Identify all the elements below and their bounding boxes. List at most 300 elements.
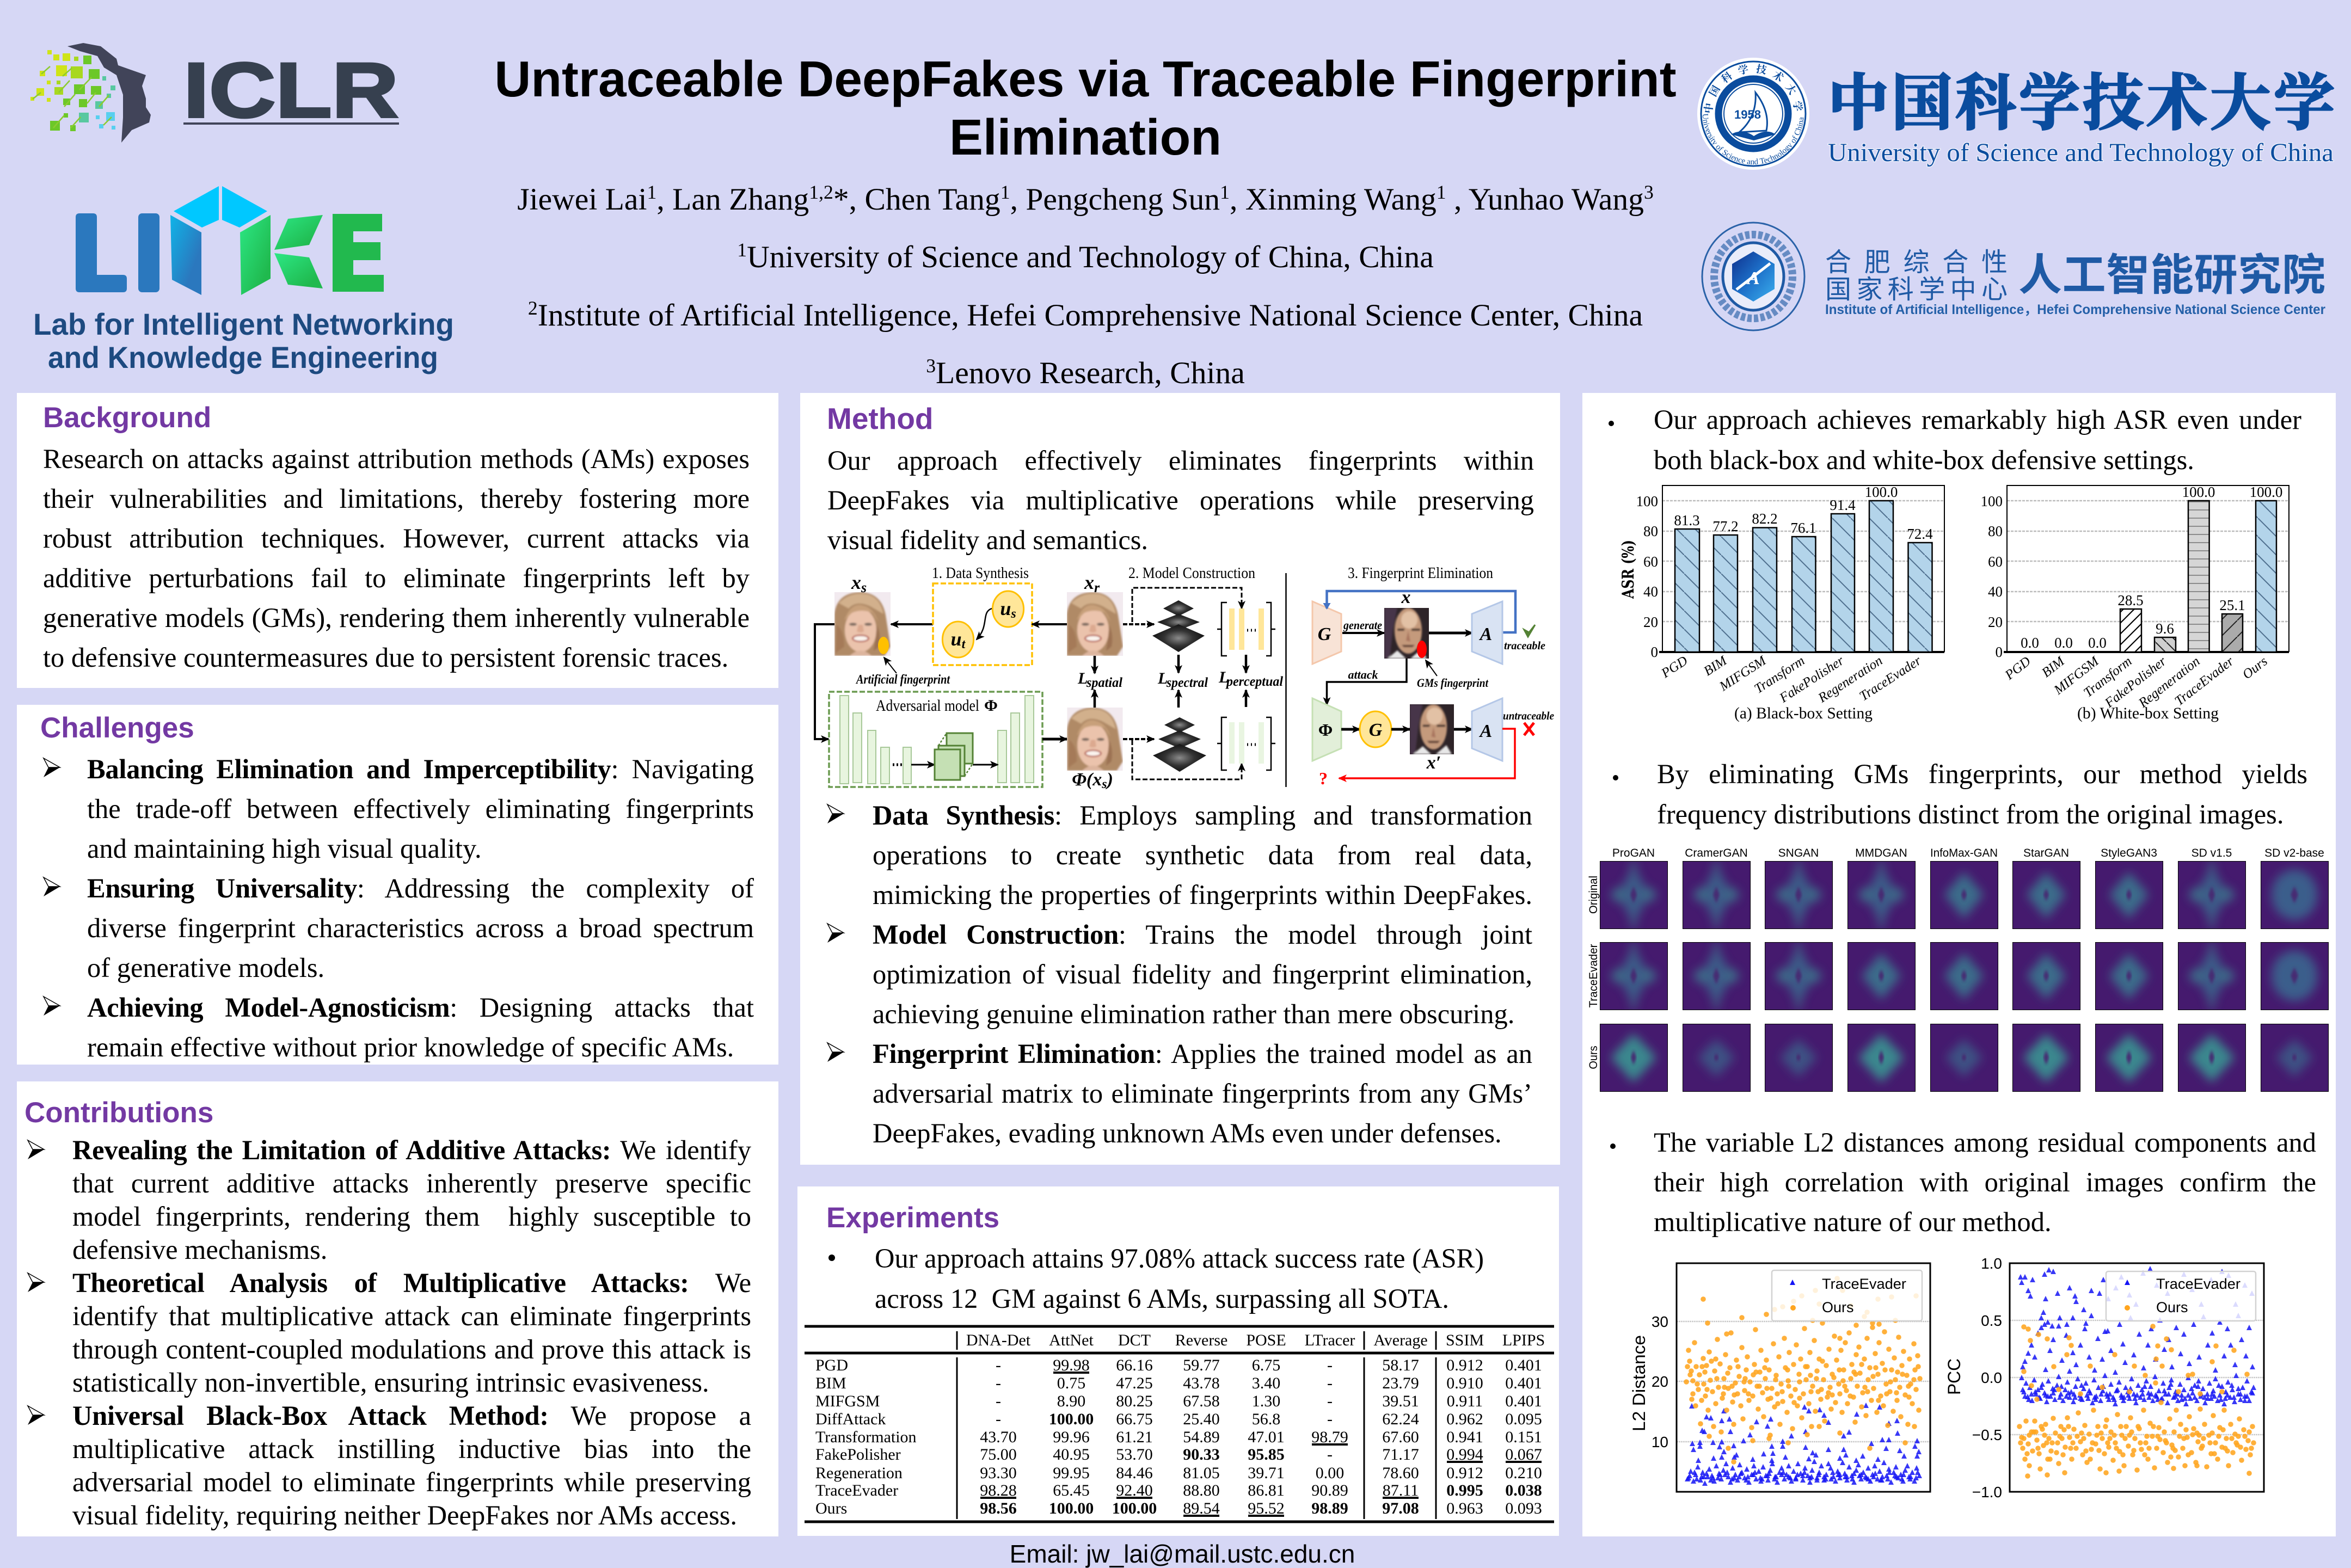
value labels: 25.1 (2219, 597, 2245, 613)
icon: lower spectrum diamonds (1153, 717, 1206, 772)
table row labels: FakePolisher (815, 1446, 901, 1464)
icon: bullet arrows (27, 1139, 46, 1425)
table values: - (996, 1392, 1001, 1410)
table values: 90.33 (1183, 1446, 1220, 1464)
value labels: 0.0 (2021, 635, 2039, 651)
label: output: ) (1106, 770, 1113, 790)
icon: bullet (828, 1255, 835, 1261)
text block: challenges list: of generative models. (87, 952, 324, 983)
label: untraceable: untraceable (1503, 709, 1554, 722)
table values: 39.51 (1382, 1392, 1419, 1410)
image: attacked face (1410, 704, 1454, 754)
heading: data synthesis: 1. Data Synthesis (932, 565, 1029, 582)
text block: contributions list (72, 1135, 751, 1530)
icon: upper feature bars (1217, 602, 1275, 656)
text block: contributions list: multiplicative attack instilling inductive bias into the (72, 1434, 751, 1464)
table values: 78.60 (1382, 1464, 1419, 1482)
value labels: 100.0 (2182, 484, 2215, 500)
table values: 98.89 (1311, 1499, 1348, 1517)
legend: L2 chart: TraceEvader (1822, 1276, 1906, 1292)
table values: 97.08 (1382, 1499, 1419, 1517)
arrow: attack (1327, 659, 1407, 705)
table row labels: MIFGSM (815, 1392, 880, 1410)
table values: 25.40 (1183, 1410, 1220, 1428)
labels: losses: L (1157, 669, 1168, 687)
table values: 67.58 (1183, 1392, 1220, 1410)
chart: scatter plots (1628, 1252, 2270, 1518)
label: x: x (1401, 587, 1411, 607)
image: output face (1067, 708, 1123, 771)
panel a: black-box bar chart (1619, 484, 1944, 722)
table row labels: Transformation (815, 1428, 917, 1446)
label: x prime: x′ (1426, 753, 1441, 773)
text block: background: to defensive countermeasures due to persistent forensic traces. (43, 642, 728, 673)
text block: ASR finding (1654, 404, 2301, 475)
block: attributor A lower (1472, 698, 1502, 761)
arrow: face to attributor (1454, 728, 1472, 730)
value labels: 72.4 (1907, 526, 1933, 542)
label: xs: s (861, 580, 867, 595)
text block: method intro: DeepFakes via multiplicative operations while preserving (827, 485, 1534, 515)
icon: institute seal: A (1746, 268, 1760, 288)
row labels: Ours (1587, 1046, 1600, 1069)
text block: method steps: Data Synthesis: Employs sampling and transformation (873, 800, 1532, 831)
icon: USTC seal: University of Science and Technology of China (1703, 113, 1804, 164)
heading: experiments: Experiments (826, 1202, 999, 1234)
text block: contributions list: Revealing the Limitation of Additive Attacks: We identify (72, 1135, 751, 1165)
text block: frequency finding (1657, 759, 2307, 829)
table values: 99.96 (1053, 1428, 1090, 1446)
y ticks: 60 (1643, 554, 1658, 570)
x labels: BIM (1701, 653, 1730, 679)
column titles: ProGAN (1612, 847, 1655, 859)
arrow: generate: generate (1343, 618, 1382, 632)
text: lab name: Lab for Intelligent Networking (33, 307, 454, 341)
arrow: model to output face (1042, 738, 1067, 740)
y axis label: ASR (%) (1619, 540, 1638, 599)
series: TraceEvader L2 points (1687, 1405, 1919, 1483)
box: adversarial model: Adversarial model (876, 697, 979, 715)
y ticks: 40 (1643, 583, 1658, 600)
text block: challenges list: diverse fingerprint characteristics across a broad spectrum (87, 913, 754, 943)
icon: LINKE letter shapes (76, 186, 384, 295)
table values: 6.75 (1252, 1356, 1280, 1374)
y ticks (1980, 493, 2003, 660)
authors and affiliations: 3Lenovo Research, China (926, 355, 1245, 390)
value labels: 100.0 (2250, 484, 2282, 500)
y axis: PCC: −1.0 (1972, 1484, 2002, 1501)
diagram: method pipeline (814, 565, 1554, 791)
box: data synthesis: u (951, 628, 962, 650)
x labels: BIM (2039, 654, 2068, 680)
table values: 95.85 (1248, 1446, 1285, 1464)
heading: challenges: Challenges (40, 712, 194, 744)
column titles: SD v2-base (2264, 847, 2324, 859)
table row labels (815, 1356, 917, 1517)
series: Ours PCC points (2019, 1326, 2254, 1476)
text block: frequency finding: frequency distributions distinct from the original images. (1657, 799, 2284, 829)
table values: 88.80 (1183, 1481, 1220, 1499)
label: output: s (1101, 777, 1107, 791)
y axis: L2 distance: 20 (1652, 1373, 1668, 1390)
text block: contributions list: visual fidelity, requiring neither DeepFakes nor AMs access. (72, 1500, 737, 1530)
y axis: PCC (1944, 1255, 2002, 1501)
table values: 81.05 (1183, 1464, 1220, 1482)
row: original spectra (1600, 860, 2329, 930)
column titles: CramerGAN (1685, 847, 1748, 859)
column titles: InfoMax-GAN (1930, 847, 1998, 859)
scatter: PCC (1944, 1255, 2264, 1501)
table values: 95.52 (1248, 1499, 1285, 1517)
block: attributor A: A (1479, 624, 1492, 644)
table values: 39.71 (1248, 1464, 1285, 1482)
text block: L2 finding (1654, 1123, 2316, 1242)
table values: 1.30 (1252, 1392, 1280, 1410)
arrow: dashed xr to features (1123, 623, 1154, 625)
label: artificial fingerprint: Artificial fingerprint (855, 673, 950, 687)
text block: background: their vulnerabilities and limitations, thereby fostering more (43, 483, 750, 514)
x labels (2002, 654, 2270, 711)
arrows: down to losses (1095, 655, 1246, 673)
table row labels: TraceEvader (815, 1481, 898, 1499)
y ticks: 0 (1650, 644, 1658, 660)
bars (1675, 501, 1932, 652)
value labels: 91.4 (1830, 497, 1856, 513)
table: attack success rates (805, 1325, 1554, 1523)
text block: background (43, 444, 750, 673)
table values: 98.28 (980, 1481, 1017, 1499)
table values: - (1327, 1446, 1333, 1464)
text block: background: robust attribution techniques. However, current attacks via (43, 523, 750, 554)
column titles (1612, 847, 2324, 859)
table values: 59.77 (1183, 1356, 1220, 1374)
arrow: feedback to adversarial model (815, 624, 834, 739)
text block: method steps: mimicking the properties of fingerprints within DeepFakes. (873, 880, 1532, 910)
text block: L2 finding: The variable L2 distances among residual components and (1654, 1127, 2316, 1158)
y axis: L2 distance: 30 (1652, 1313, 1668, 1330)
icon: bullet (1613, 775, 1618, 780)
table values: 0.067 (1505, 1446, 1542, 1464)
table values: 0.912 (1446, 1464, 1483, 1482)
table row labels: Ours (815, 1499, 847, 1517)
box: data synthesis: u (1000, 598, 1011, 619)
table values: 43.78 (1183, 1374, 1220, 1392)
table values: 62.24 (1382, 1410, 1419, 1428)
label: question mark: ? (1319, 768, 1328, 788)
labels: losses: perceptual (1225, 674, 1283, 689)
icon: institute seal (1702, 223, 1804, 330)
block: adversarial model phi (1312, 698, 1341, 761)
value labels: 100.0 (1865, 484, 1898, 500)
label: xr: r (1094, 580, 1100, 595)
row: TraceEvader spectra (1600, 941, 2329, 1011)
panel: experiments (797, 1186, 1559, 1536)
text block: contributions list: identify that multiplicative attack can eliminate fingerprints (72, 1301, 751, 1331)
y ticks: 0 (1996, 644, 2003, 660)
block: generator G (1312, 601, 1341, 664)
text block: method steps: achieving genuine elimination rather than mere obscuring. (873, 999, 1514, 1029)
panel: method (800, 393, 1560, 1165)
label: GMs fingerprint (1417, 660, 1489, 690)
table values: 0.962 (1446, 1410, 1483, 1428)
legend: L2 chart: Ours (1822, 1299, 1854, 1315)
text block: method intro: visual fidelity and semantics. (827, 525, 1148, 555)
text block: experiments summary: across 12 GM against 6 AMs, surpassing all SOTA. (875, 1283, 1449, 1314)
text block: method steps: adversarial matrix to eliminate fingerprints from any GMs’ (873, 1078, 1532, 1109)
table values: 3.40 (1252, 1374, 1280, 1392)
table values: 56.8 (1252, 1410, 1280, 1428)
table values: 89.54 (1183, 1499, 1220, 1517)
text block: L2 finding: their high correlation with original images confirm the (1654, 1167, 2316, 1197)
table row labels: Regeneration (815, 1464, 903, 1482)
table values: 0.093 (1505, 1499, 1542, 1517)
y axis: PCC: 0.0 (1981, 1369, 2002, 1386)
table values: 61.21 (1116, 1428, 1153, 1446)
table header: DNA-Det (966, 1331, 1031, 1349)
panel: background (17, 393, 778, 688)
table values: 80.25 (1116, 1392, 1153, 1410)
text block: challenges list: remain effective without prior knowledge of specific AMs. (87, 1032, 734, 1062)
text: ICLR wordmark: ICLR (183, 47, 398, 134)
table values: 99.95 (1053, 1464, 1090, 1482)
table values: 87.11 (1383, 1481, 1419, 1499)
box: data synthesis: s (1010, 607, 1016, 621)
table values: 8.90 (1057, 1392, 1085, 1410)
x labels (1659, 653, 1924, 706)
table row labels: BIM (815, 1374, 846, 1392)
legend: PCC chart: TraceEvader (2156, 1276, 2240, 1292)
chart: ASR bars (1619, 484, 2289, 722)
caption a: (a) Black-box Setting (1734, 704, 1873, 722)
box: adversarial model: Φ (984, 697, 998, 715)
value labels (1674, 484, 1933, 542)
text block: challenges list (87, 754, 754, 1062)
authors and affiliations: Jiewei Lai1, Lan Zhang1,2*, Chen Tang1, Pengcheng Sun1, Xinming Wang1 , Yunhao Wang3 (517, 181, 1654, 217)
y axis: L2 distance (1629, 1313, 1668, 1450)
arrow: synthesis to xs (891, 623, 933, 625)
x labels: Regeneration (1815, 653, 1885, 706)
label: xs: x (851, 571, 861, 593)
y ticks: 20 (1988, 614, 2003, 630)
text block: challenges list: Balancing Elimination and Imperceptibility: Navigating (87, 754, 754, 784)
table header: LTracer (1305, 1331, 1355, 1349)
icon: check mark (1524, 625, 1535, 637)
table values (980, 1356, 1542, 1517)
table values: 54.89 (1183, 1428, 1220, 1446)
table header: SSIM (1446, 1331, 1484, 1349)
icon: USTC seal: 1958 (1734, 108, 1761, 121)
value labels: 81.3 (1674, 512, 1700, 528)
value labels: 9.6 (2156, 620, 2174, 637)
text: institute large Chinese name: 人工智能研究院 (2018, 251, 2325, 299)
value labels (2021, 484, 2282, 651)
text block: challenges list: the trade-off between effectively eliminating fingerprints (87, 794, 754, 824)
text: USTC English name: University of Science and Technology of China (1828, 138, 2334, 167)
icon: bullet (1609, 421, 1614, 426)
heading: background: Background (43, 402, 211, 434)
block: attributor A (1472, 601, 1502, 664)
table values: 90.89 (1311, 1481, 1348, 1499)
column titles: StyleGAN3 (2101, 847, 2157, 859)
icon: bullet arrows (42, 757, 62, 1016)
table values: 58.17 (1382, 1356, 1419, 1374)
x labels: PGD (1659, 653, 1690, 681)
table values: 66.16 (1116, 1356, 1153, 1374)
text block: ASR finding: Our approach achieves remarkably high ASR even under (1654, 404, 2301, 435)
label: xr: x (1084, 571, 1094, 593)
arrow: G to face (1391, 728, 1410, 730)
table values: 0.994 (1446, 1446, 1483, 1464)
x labels: Transform (1752, 653, 1807, 697)
table values: 86.81 (1248, 1481, 1285, 1499)
table values: 53.70 (1116, 1446, 1153, 1464)
text block: experiments summary (875, 1243, 1484, 1314)
label: traceable: traceable (1504, 639, 1545, 652)
text block: experiments summary: Our approach attains 97.08% attack success rate (ASR) (875, 1243, 1484, 1274)
table values: 100.00 (1049, 1499, 1094, 1517)
icon: bullet (1610, 1143, 1616, 1149)
table header: Average (1373, 1331, 1428, 1349)
x labels: MIFGSM (2051, 654, 2102, 698)
scatter: L2 distance (1629, 1263, 1930, 1492)
image: source face xs (834, 592, 891, 656)
x labels: Ours (2240, 654, 2270, 682)
table header (966, 1331, 1545, 1349)
title: Elimination (949, 109, 1221, 165)
title: Untraceable DeepFakes via Traceable Fingerprint (494, 51, 1677, 107)
column titles: SNGAN (1778, 847, 1819, 859)
table values: 100.00 (1049, 1410, 1094, 1428)
icon: USTC seal (1697, 58, 1809, 170)
table values: 40.95 (1053, 1446, 1090, 1464)
table values: 0.941 (1446, 1428, 1483, 1446)
table header: Reverse (1175, 1331, 1227, 1349)
text: institute English name: Institute of Artificial Intelligence，Hefei Comprehensive National Science Center (1825, 302, 2325, 317)
table values: 0.038 (1505, 1481, 1542, 1499)
label: GMs fingerprint: GMs fingerprint (1417, 676, 1489, 690)
text block: contributions list: adversarial model to eliminate fingerprints while preserving (72, 1467, 751, 1497)
table row labels: DiffAttack (815, 1410, 886, 1428)
x labels: PGD (2002, 654, 2034, 683)
arrow: traceable feedback (1327, 591, 1515, 632)
x labels: TraceEvader (2172, 654, 2237, 709)
value labels: 77.2 (1712, 518, 1739, 534)
box: dashed path to perceptual features (1132, 588, 1242, 622)
table values: 92.40 (1116, 1481, 1153, 1499)
text: institute small Chinese name: 国家科学中心 (1825, 275, 2008, 304)
table values: 0.401 (1505, 1374, 1542, 1392)
logo: USTC (1697, 58, 2335, 170)
y axis: PCC: PCC (1944, 1358, 1964, 1395)
text block: contributions list: model fingerprints, rendering them highly susceptible to (72, 1201, 751, 1232)
text: institute small Chinese name: 合肥综合性 (1825, 248, 2008, 277)
table values: 93.30 (980, 1464, 1017, 1482)
text block: contributions list: statistically non-invertible, ensuring intrinsic evasiveness. (72, 1367, 709, 1398)
x labels: Transform (2081, 654, 2135, 700)
y axis: PCC: −0.5 (1972, 1426, 2002, 1443)
legend: PCC chart: Ours (2156, 1299, 2188, 1315)
table values: 0.911 (1447, 1392, 1483, 1410)
logo: ICLR (30, 43, 399, 143)
table values: 66.75 (1116, 1410, 1153, 1428)
caption b: (b) White-box Setting (2077, 704, 2219, 722)
arrows: up to losses (1095, 690, 1246, 708)
icon: USTC seal: 中国科学技术大学 (1703, 64, 1803, 113)
table values: 98.56 (980, 1499, 1017, 1517)
arrow: dashed output to features (1123, 738, 1154, 740)
labels: losses (1077, 668, 1283, 690)
chart: frequency spectra grid (1587, 844, 2332, 1097)
text block: background: additive perturbations fail to eliminate fingerprints left by (43, 563, 750, 593)
column titles: SD v1.5 (2192, 847, 2232, 859)
value labels: 28.5 (2117, 592, 2144, 608)
label: artificial fingerprint (855, 657, 950, 687)
text block: contributions list: defensive mechanisms. (72, 1234, 327, 1265)
x labels: FakePolisher (1777, 653, 1846, 706)
x labels: Regeneration (2135, 654, 2203, 711)
table values: 47.25 (1116, 1374, 1153, 1392)
table values: 0.912 (1446, 1356, 1483, 1374)
labels: losses: L (1077, 669, 1088, 687)
table header: LPIPS (1502, 1331, 1545, 1349)
value labels: 0.0 (2054, 635, 2073, 651)
text: institute small Chinese name (1825, 248, 2008, 304)
heading: method: Method (827, 402, 934, 435)
table values: 0.910 (1446, 1374, 1483, 1392)
table values: - (996, 1374, 1001, 1392)
table values: 67.60 (1382, 1428, 1419, 1446)
table values: - (1327, 1374, 1333, 1392)
box: data synthesis: t (962, 637, 966, 651)
block: attributor A lower: A (1479, 721, 1492, 741)
heading: model construction: 2. Model Construction (1128, 565, 1255, 582)
panel: challenges (17, 705, 778, 1065)
table underlines (980, 1373, 1542, 1516)
y ticks: 20 (1643, 614, 1658, 630)
table values: 0.00 (1316, 1464, 1344, 1482)
authors and affiliations: 1University of Science and Technology of China, China (737, 239, 1434, 274)
table values: 43.70 (980, 1428, 1017, 1446)
table values: 0.401 (1505, 1356, 1542, 1374)
table header: POSE (1246, 1331, 1286, 1349)
text block: frequency finding: By eliminating GMs fingerprints, our method yields (1657, 759, 2307, 789)
y ticks: 80 (1643, 523, 1658, 539)
text block: background: generative models (GMs), rendering them inherently vulnerable (43, 602, 750, 633)
column titles: StarGAN (2023, 847, 2069, 859)
table values: 0.963 (1446, 1499, 1483, 1517)
icon: red cross (1524, 723, 1534, 735)
text block: method intro: Our approach effectively eliminates fingerprints within (827, 445, 1534, 476)
row labels: Original (1587, 876, 1600, 914)
text block: contributions list: Theoretical Analysis of Multiplicative Attacks: We (72, 1268, 751, 1298)
table header: DCT (1118, 1331, 1151, 1349)
text block: contributions list: Universal Black-Box Attack Method: We propose a (72, 1400, 751, 1431)
table values: 75.00 (980, 1446, 1017, 1464)
arrow: untraceable return (1339, 729, 1515, 778)
heading: fingerprint elimination: 3. Fingerprint Elimination (1348, 565, 1493, 582)
text block: method steps: optimization of visual fidelity and fingerprint elimination, (873, 959, 1532, 989)
row labels (1587, 876, 1600, 1069)
table values: 99.98 (1053, 1356, 1090, 1374)
title (494, 51, 1677, 165)
text block: background: Research on attacks against attribution methods (AMs) exposes (43, 444, 750, 474)
arrow: xr to synthesis (1032, 623, 1067, 625)
block: adversarial model phi: Φ (1318, 720, 1333, 740)
image: generated face (1384, 608, 1429, 659)
image: real face xr (1067, 592, 1123, 656)
text block: method steps (873, 800, 1532, 1148)
y ticks: 100 (1636, 493, 1658, 509)
